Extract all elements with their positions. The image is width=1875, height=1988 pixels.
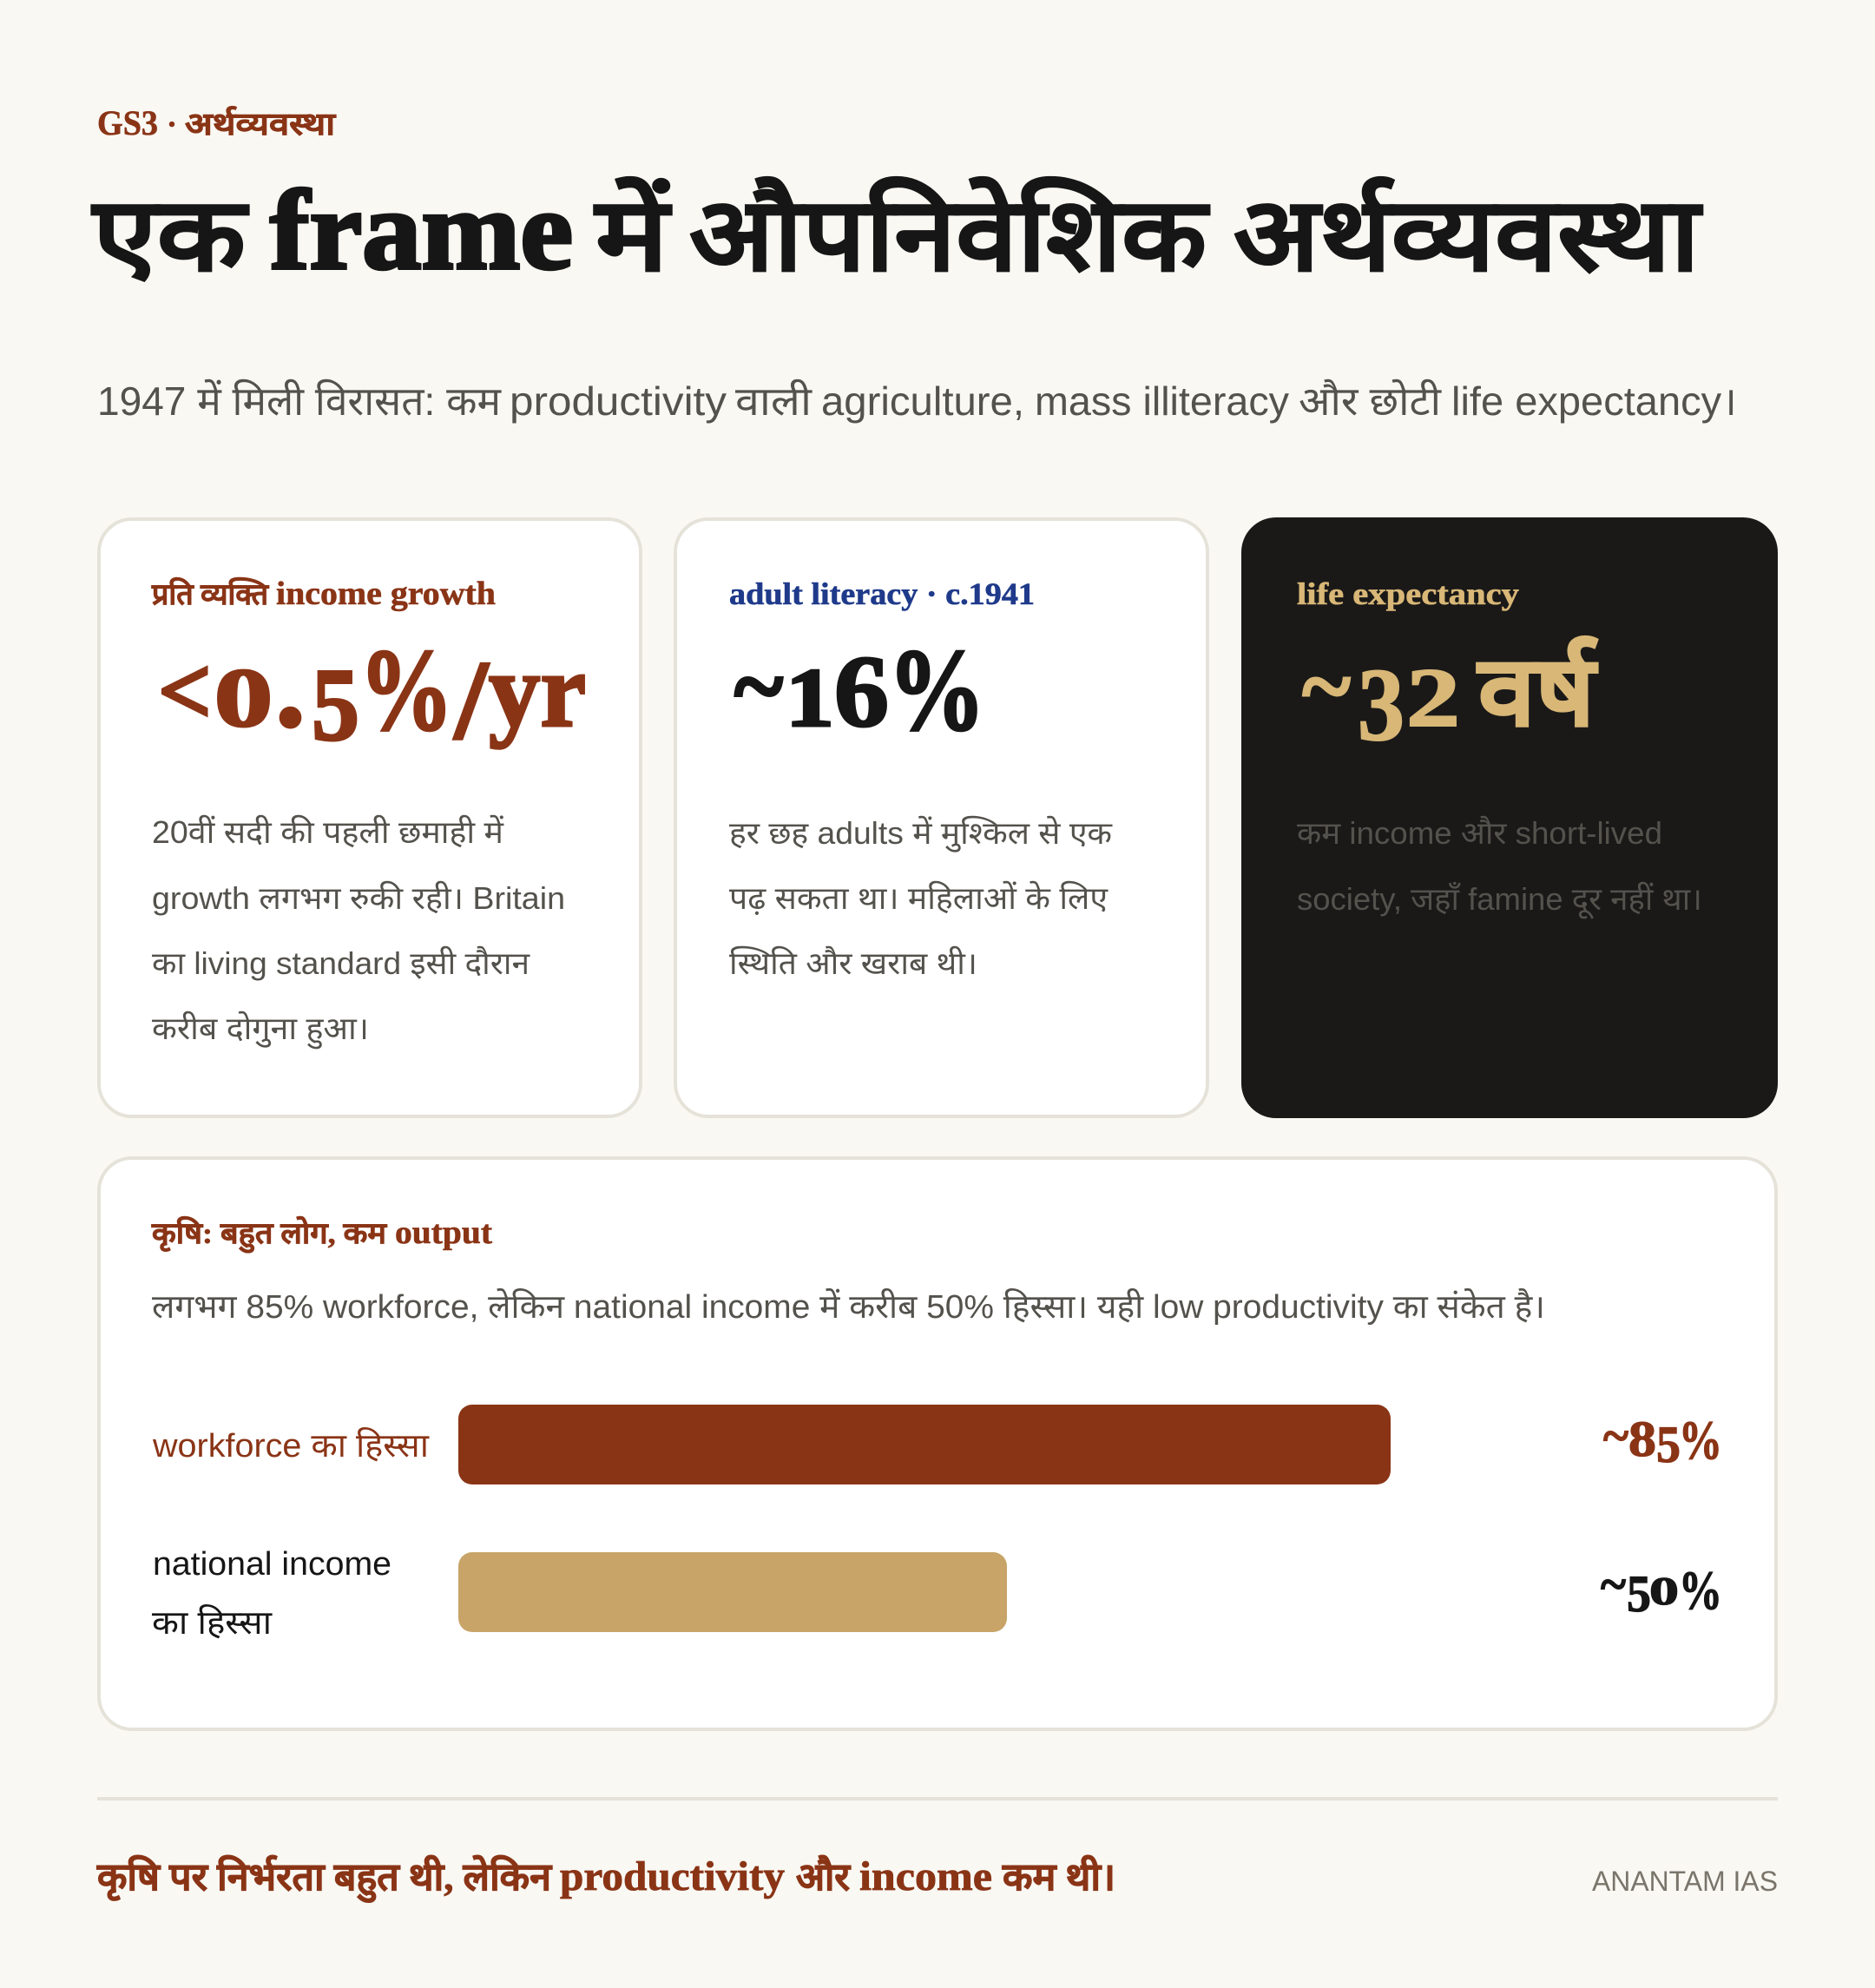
title: frame — [270, 168, 573, 293]
footer takeaway: कृषि पर निर्भरता बहुत थी, लेकिन — [96, 1854, 553, 1903]
bar value: 5 — [1656, 1416, 1681, 1473]
stat: 2 — [1406, 651, 1460, 744]
bar value: 8 — [1628, 1411, 1656, 1467]
card body text: growth लगभग रुकी रही। Britain — [152, 880, 565, 916]
subtitle: life expectancy। — [1451, 379, 1737, 424]
card body text: 20वीं सदी की पहली छमाही में — [152, 814, 505, 850]
bar value: % — [1679, 1409, 1722, 1471]
stat: yr — [489, 632, 586, 749]
card body text: करीब दोगुना हुआ। — [152, 1010, 369, 1050]
divider — [97, 1797, 1778, 1800]
bar value: ~ — [1601, 1556, 1626, 1612]
subtitle: productivity — [510, 379, 727, 424]
bar value: ~ — [1603, 1407, 1628, 1464]
footer brand: ANANTAM IAS — [1592, 1866, 1778, 1897]
eyebrow: · — [167, 107, 177, 142]
subtitle: agriculture, — [821, 379, 1024, 424]
panel: agriculture comparison — [99, 1158, 1776, 1729]
stat: . — [275, 618, 306, 753]
stat: / — [453, 638, 490, 763]
bar value: 5 — [1627, 1565, 1651, 1623]
panel: income growth card — [99, 519, 641, 1116]
eyebrow: अर्थव्यवस्था — [185, 106, 337, 142]
panel heading: कृषि: बहुत लोग, कम — [151, 1215, 388, 1254]
stat: % — [359, 626, 453, 755]
stat: ~ — [734, 633, 783, 741]
panel heading: output — [395, 1215, 492, 1251]
stat: 0 — [214, 651, 273, 744]
eyebrow: GS3 — [97, 103, 158, 142]
card body text: हर छह adults में मुश्किल से एक — [729, 815, 1113, 852]
panel: life expectancy card — [1241, 517, 1778, 1118]
stat: वर्ष — [1477, 635, 1598, 747]
bar — [458, 1552, 1007, 1632]
card label: प्रति व्यक्ति — [151, 576, 270, 611]
stat: 3 — [1358, 647, 1405, 762]
subtitle: वाली — [735, 379, 812, 424]
subtitle: और छोटी — [1299, 379, 1442, 424]
card label: adult literacy · c.1941 — [729, 576, 1035, 611]
bar row: national income — [152, 1546, 1722, 1642]
stat: < — [158, 638, 212, 744]
card body text: पढ़ सकता था। महिलाओं के लिए — [729, 880, 1109, 916]
stat: % — [888, 626, 985, 755]
footer takeaway: income — [859, 1853, 992, 1899]
footer takeaway: और — [796, 1854, 852, 1899]
bar — [458, 1405, 1391, 1484]
stat: 1 — [786, 651, 834, 744]
stat: 6 — [834, 635, 889, 748]
card body text — [1297, 815, 1702, 919]
panel: adult literacy card — [675, 519, 1207, 1116]
title: एक — [91, 179, 250, 293]
panel description: लगभग 85% workforce, लेकिन national income में करीब 50% हिस्सा। यही low productivity का संकेत है। — [152, 1287, 1545, 1326]
card body text: कम income और short-lived — [1297, 815, 1662, 851]
title: में — [594, 176, 673, 293]
footer takeaway: productivity — [560, 1853, 785, 1899]
subtitle: 1947 में मिली विरासत: कम — [97, 379, 502, 424]
stat: ~ — [1302, 633, 1351, 741]
title: अर्थव्यवस्था — [1234, 176, 1704, 293]
bar label: workforce का हिस्सा — [152, 1426, 430, 1465]
card body text: स्थिति और खराब थी। — [729, 945, 977, 981]
subtitle: mass illiteracy — [1035, 379, 1289, 424]
bar label: का हिस्सा — [152, 1603, 273, 1642]
bar row: workforce — [152, 1405, 1722, 1484]
card label: life expectancy — [1297, 576, 1519, 611]
bar label — [152, 1546, 391, 1642]
title: औपनिवेशिक — [689, 176, 1211, 293]
card body text — [152, 814, 565, 1050]
footer takeaway: कम थी। — [1002, 1854, 1115, 1899]
bar value: 0 — [1649, 1569, 1679, 1613]
stat: 5 — [312, 647, 359, 762]
bar label: national income — [153, 1546, 391, 1583]
card body text — [729, 815, 1113, 981]
card body text: society, जहाँ famine दूर नहीं था। — [1297, 881, 1702, 919]
card body text: का living standard इसी दौरान — [152, 945, 530, 981]
card label: income growth — [276, 576, 496, 612]
bar value: % — [1679, 1559, 1722, 1621]
